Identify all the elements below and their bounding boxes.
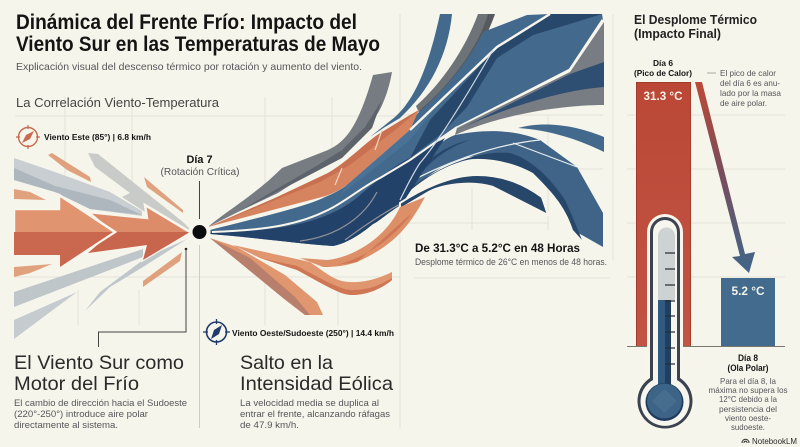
text block: wind intensity	[240, 352, 393, 430]
note: day 6 peak: lado por la masa	[720, 88, 781, 98]
ribbon: right blue strip	[518, 125, 604, 152]
text block: south wind: directamente al sistema.	[14, 420, 118, 430]
thermometer	[634, 214, 695, 431]
title: Viento Sur en las Temperaturas de Mayo	[16, 32, 380, 56]
bar: day 8 temperature	[721, 278, 775, 346]
arrow: temperature drop	[695, 82, 755, 273]
note: day 6 peak: del día 6 es anu-	[720, 78, 780, 88]
ribbon: gray stripe	[416, 14, 495, 115]
text block: south wind: (220°-250°) introduce aire polar	[14, 409, 148, 419]
label: day 6: (Pico de Calor)	[634, 68, 692, 78]
watermark: NotebookLM: NotebookLM	[752, 436, 797, 446]
ribbon: blue left strip	[370, 14, 452, 137]
ribbon: lower orange	[210, 197, 425, 315]
label: day 8: (Ola Polar)	[728, 363, 768, 373]
note: day 8	[708, 376, 788, 432]
note: day 8: 12°C debido a la	[719, 394, 777, 404]
text block: 48 hours	[415, 241, 607, 267]
note: day 8: persistencia del	[719, 404, 777, 414]
label: east wind: Viento Este (85°) | 6.8 km/h	[44, 132, 151, 142]
central rotation point	[188, 221, 210, 243]
section heading: correlation: La Correlación Viento-Temperatura	[16, 95, 220, 110]
text block: 48 hours: De 31.3°C a 5.2°C en 48 Horas	[415, 241, 580, 255]
note: day 6 peak	[707, 68, 781, 108]
note: day 8: sudoeste.	[731, 422, 765, 432]
bar: day 6 temperature: 31.3 °C	[644, 89, 683, 103]
ribbon: main blue	[210, 14, 603, 246]
text block: south wind: Motor del Frío	[14, 373, 139, 395]
text block: south wind: El Viento Sur como	[14, 352, 184, 374]
note: day 6 peak: de aire polar.	[720, 98, 767, 108]
note: day 8: viento oeste-	[725, 413, 771, 423]
ribbon: orange	[208, 110, 419, 227]
note: day 8: Para el día 8, la	[720, 376, 776, 386]
icon: east wind compass	[16, 125, 40, 149]
bar: day 8 temperature: 5.2 °C	[732, 284, 765, 298]
label: day 8: Día 8	[738, 353, 758, 363]
text block: wind intensity: La velocidad media se duplica al	[240, 398, 379, 408]
note: day 6 peak: El pico de calor	[720, 68, 776, 78]
axis baseline	[627, 346, 785, 348]
text block: south wind	[14, 352, 187, 430]
label: day 7: Día 7	[186, 154, 212, 166]
text block: 48 hours: Desplome térmico de 26°C en menos de 48 horas.	[415, 257, 607, 267]
arrow: front arrow	[14, 195, 115, 268]
ribbon: upper blue	[400, 14, 550, 134]
ribbon: right gray	[455, 22, 604, 135]
subtitle: Explicación visual del descenso térmico por rotación y aumento del viento.	[16, 61, 362, 73]
title	[16, 10, 380, 56]
bar: day 6 temperature	[636, 82, 691, 346]
label: day 8	[728, 353, 768, 373]
label: west wind: Viento Oeste/Sudoeste (250°) | 14.4 km/h	[232, 328, 394, 338]
label: day 6: Día 6	[653, 58, 673, 68]
westerly wind outgoing ribbons	[208, 14, 604, 315]
east wind incoming arrows	[14, 153, 192, 339]
note: day 8: máxima no supera los	[708, 385, 788, 395]
label: day 7	[160, 154, 240, 219]
text block: wind intensity: de 47.9 km/h.	[240, 420, 299, 430]
label: day 7: (Rotación Crítica)	[160, 167, 240, 178]
ribbon: lower blue	[398, 131, 603, 247]
arrow: back arrow	[88, 205, 190, 260]
text block: wind intensity: Salto en la	[240, 352, 333, 374]
label: day 6	[634, 58, 692, 78]
text block: south wind: El cambio de dirección hacia el Sudoeste	[14, 398, 187, 408]
icon: west wind compass	[203, 319, 230, 345]
ribbon: top gray	[208, 72, 392, 227]
text block: wind intensity: entrar el frente, alcanzando ráfagas	[240, 409, 390, 419]
text block: wind intensity: Intensidad Eólica	[240, 373, 393, 395]
ribbon: dark arch	[400, 175, 548, 215]
heading: thermal collapse: El Desplome Térmico	[634, 13, 757, 27]
heading: thermal collapse: (Impacto Final)	[634, 27, 721, 41]
heading: thermal collapse	[634, 13, 757, 41]
title: Dinámica del Frente Frío: Impacto del	[16, 10, 357, 34]
callout leader line	[98, 248, 187, 347]
